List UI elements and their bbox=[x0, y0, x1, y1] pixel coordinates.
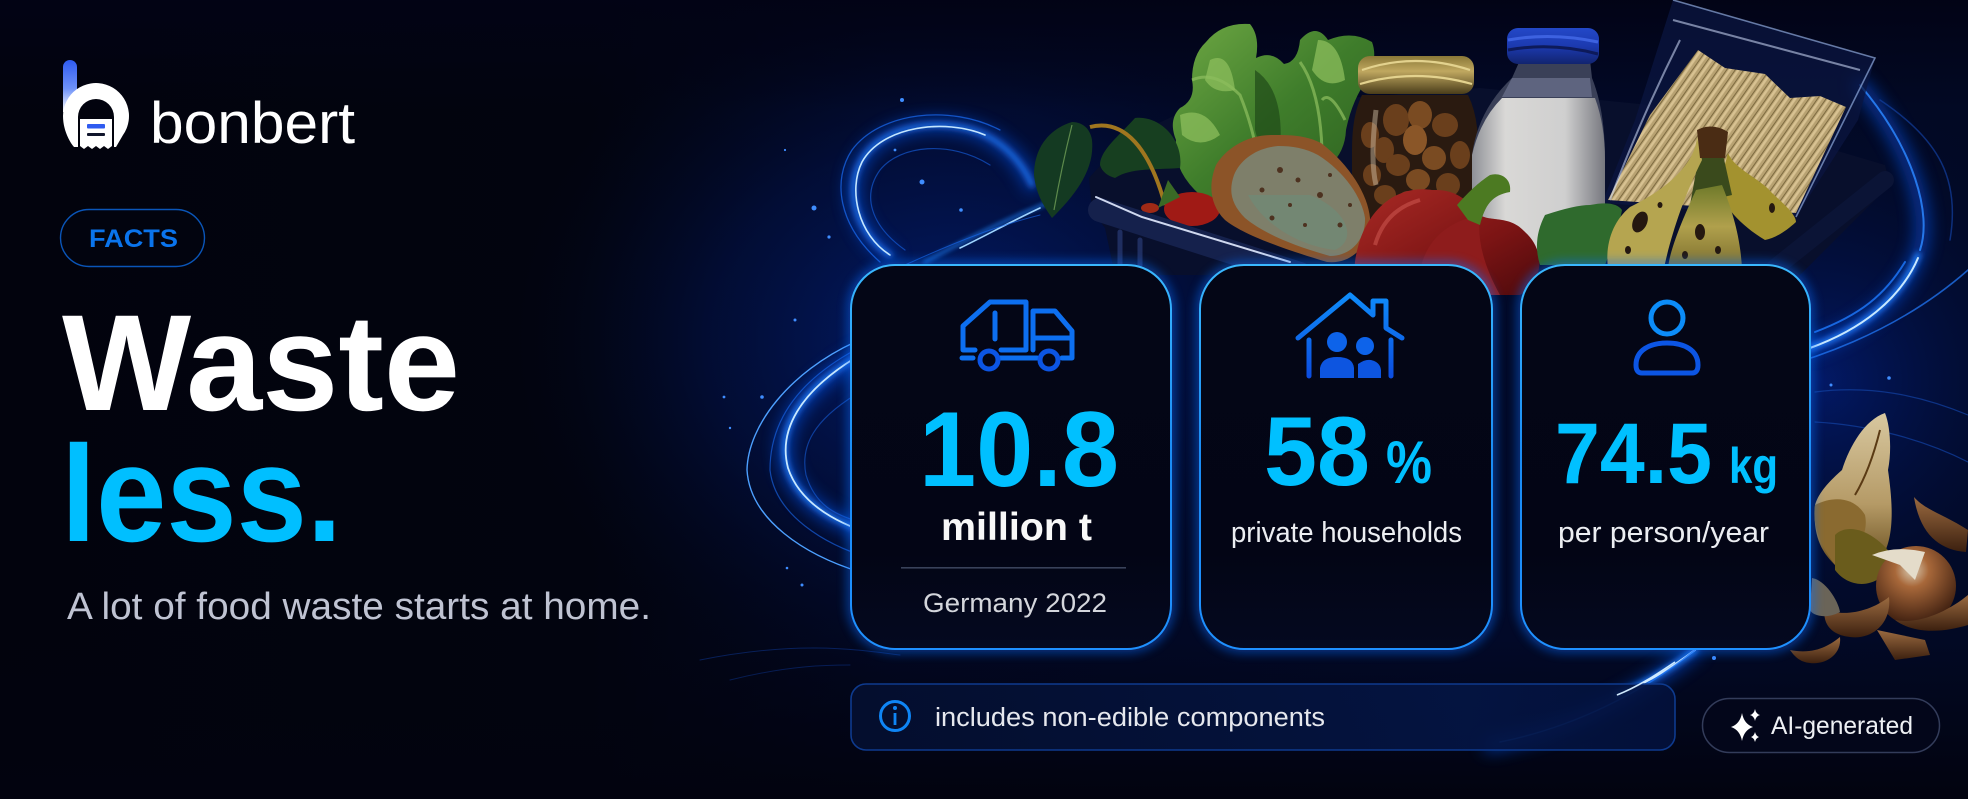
title: less. bbox=[61, 418, 342, 571]
subtitle: A lot of food waste starts at home. bbox=[67, 586, 651, 628]
icon: sparkle bbox=[1731, 709, 1760, 742]
green leaves with stem bbox=[1034, 118, 1180, 218]
title: Waste bbox=[62, 287, 460, 440]
bananas bbox=[1607, 126, 1796, 268]
onion bbox=[1872, 546, 1956, 626]
panel: total food waste bbox=[851, 265, 1171, 649]
tag: FACTS bbox=[60, 210, 204, 266]
lettuce bbox=[1173, 24, 1374, 205]
bread slice bbox=[1211, 135, 1370, 262]
jar of beans bbox=[1352, 56, 1478, 225]
panel: statistic cards bbox=[851, 265, 1810, 649]
lower left swirl bbox=[747, 342, 910, 572]
shell pieces bbox=[1790, 497, 1968, 663]
food basket with groceries bbox=[1034, 0, 1890, 295]
icon: delivery truck bbox=[962, 302, 1072, 369]
badge: AI-generated bbox=[1702, 698, 1940, 752]
basket rim bbox=[1096, 180, 1885, 274]
bottom swirl bbox=[700, 648, 1695, 745]
label: Germany 2022 bbox=[923, 588, 1107, 618]
value: 10.8 bbox=[919, 389, 1119, 509]
icon: info bbox=[880, 702, 910, 730]
icon: person bbox=[1636, 302, 1698, 373]
pasta bag bbox=[1602, 0, 1875, 217]
badge text: AI-generated bbox=[1771, 712, 1913, 740]
red bell pepper bbox=[1355, 174, 1539, 295]
food scraps bbox=[1790, 413, 1968, 663]
decorative light swirls and stars bbox=[700, 85, 1968, 745]
footnote bar bbox=[851, 662, 1675, 750]
stars bbox=[723, 98, 1891, 660]
footnote text: includes non-edible components bbox=[935, 704, 1325, 732]
upper left swirl bbox=[841, 115, 1048, 265]
right swirl bbox=[1730, 85, 1968, 462]
logo wordmark: bonbert bbox=[150, 91, 355, 156]
unit: million t bbox=[941, 506, 1092, 549]
label: per person/year bbox=[1558, 517, 1769, 549]
milk bottle bbox=[1472, 28, 1605, 258]
title bbox=[61, 287, 460, 571]
banana peel bbox=[1814, 413, 1895, 584]
green herbs bbox=[1537, 203, 1622, 265]
panel: per person bbox=[1521, 265, 1810, 649]
panel: private households bbox=[1200, 265, 1492, 649]
value: 74.5 bbox=[1555, 406, 1712, 502]
label: private households bbox=[1231, 517, 1462, 549]
tag: FACTS: FACTS bbox=[89, 225, 178, 253]
tomato bbox=[1141, 180, 1220, 226]
unit: % bbox=[1386, 429, 1432, 496]
icon: house with family bbox=[1298, 295, 1402, 378]
unit: kg bbox=[1729, 438, 1778, 494]
logo bbox=[63, 60, 355, 156]
value: 58 bbox=[1264, 396, 1370, 506]
basket body bbox=[1089, 88, 1890, 275]
logo mark bbox=[63, 60, 129, 149]
